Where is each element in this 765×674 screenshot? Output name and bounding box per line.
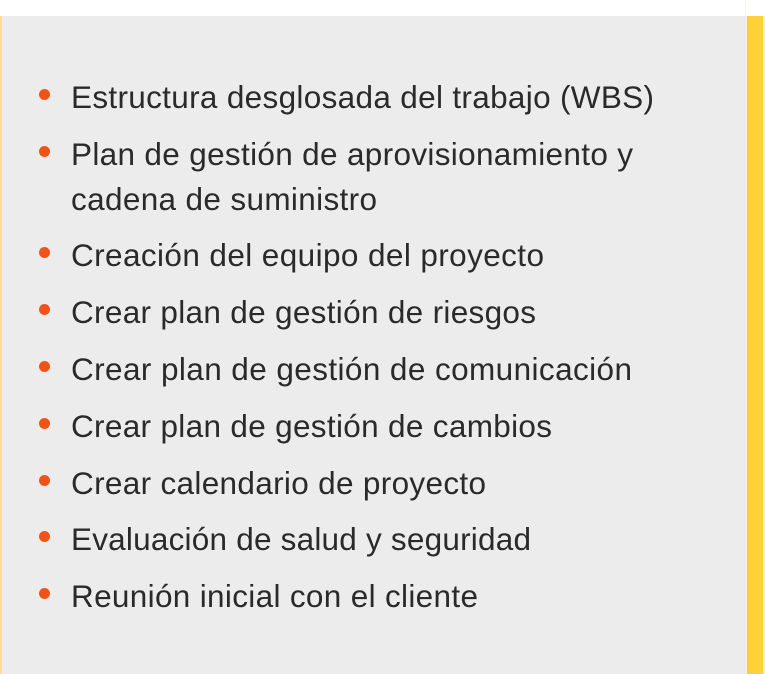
list item: procurement plan: cadena de suministro (71, 181, 377, 217)
accent bar: yellow right edge (747, 16, 763, 674)
list item: procurement plan (39, 136, 633, 217)
list item: WBS: Estructura desglosada del trabajo (WBS) (71, 79, 654, 115)
list item: procurement plan: Plan de gestión de aprovisionamiento y (71, 136, 633, 172)
list item: communication plan: Crear plan de gestión de comunicación (71, 351, 632, 387)
list item: project schedule: Crear calendario de proyecto (71, 465, 486, 501)
list item: project team: Creación del equipo del proyecto (71, 237, 544, 273)
list item: health and safety: Evaluación de salud y seguridad (71, 521, 531, 557)
bullet list (39, 79, 654, 614)
list item: change plan: Crear plan de gestión de cambios (71, 408, 552, 444)
list item: client kickoff: Reunión inicial con el cliente (71, 578, 478, 614)
list item: risk plan: Crear plan de gestión de riesgos (71, 294, 536, 330)
